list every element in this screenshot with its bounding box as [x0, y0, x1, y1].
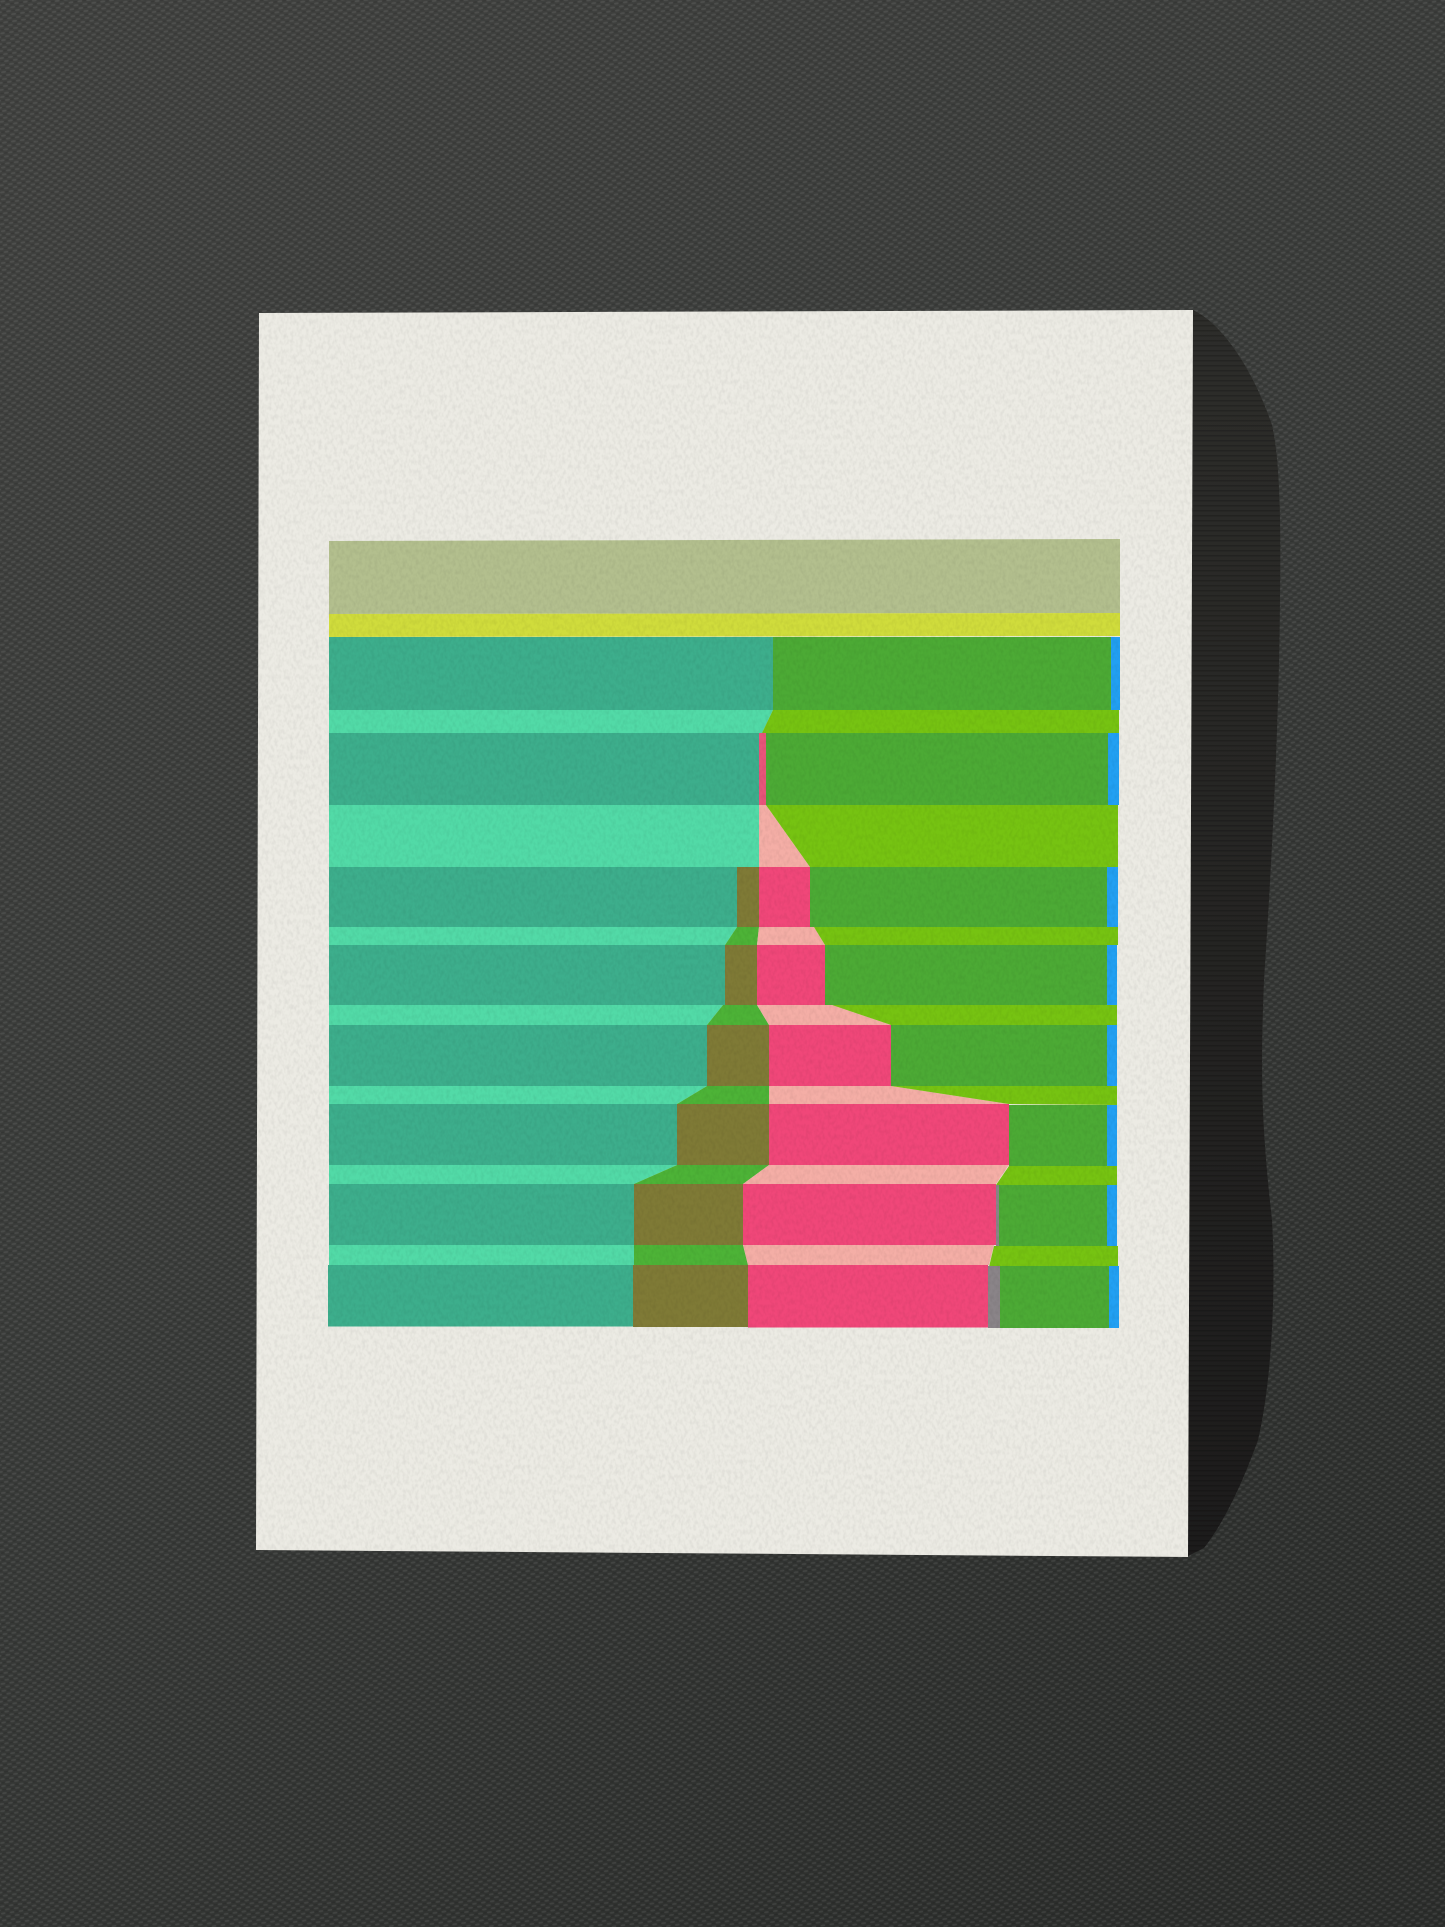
row 1: teal, green, blue [329, 637, 1120, 710]
light row 3 [329, 927, 1118, 945]
band: yellow stripe [329, 613, 1120, 637]
row 7 [329, 1184, 1117, 1246]
row 5 [329, 1025, 1117, 1086]
cast shadow of the paper [1188, 310, 1280, 1556]
row 4 [329, 945, 1117, 1005]
light row 2: wide with peach wedge [329, 805, 1118, 867]
row 8 [328, 1265, 1119, 1328]
light row 7 [329, 1245, 1118, 1267]
row 2: teal, pink sliver, green, blue [329, 733, 1119, 805]
row 3 [329, 867, 1118, 927]
light row 5 [329, 1086, 1117, 1105]
light row 1 [329, 710, 1119, 733]
band: top sage stripe [329, 539, 1120, 614]
light row 4 [329, 1005, 1117, 1025]
row 6 [329, 1104, 1117, 1166]
artwork: stacked flow bands [328, 539, 1120, 1328]
light row 6 [329, 1165, 1117, 1185]
paper sheet [256, 310, 1193, 1557]
paper grain texture [250, 305, 1200, 1565]
